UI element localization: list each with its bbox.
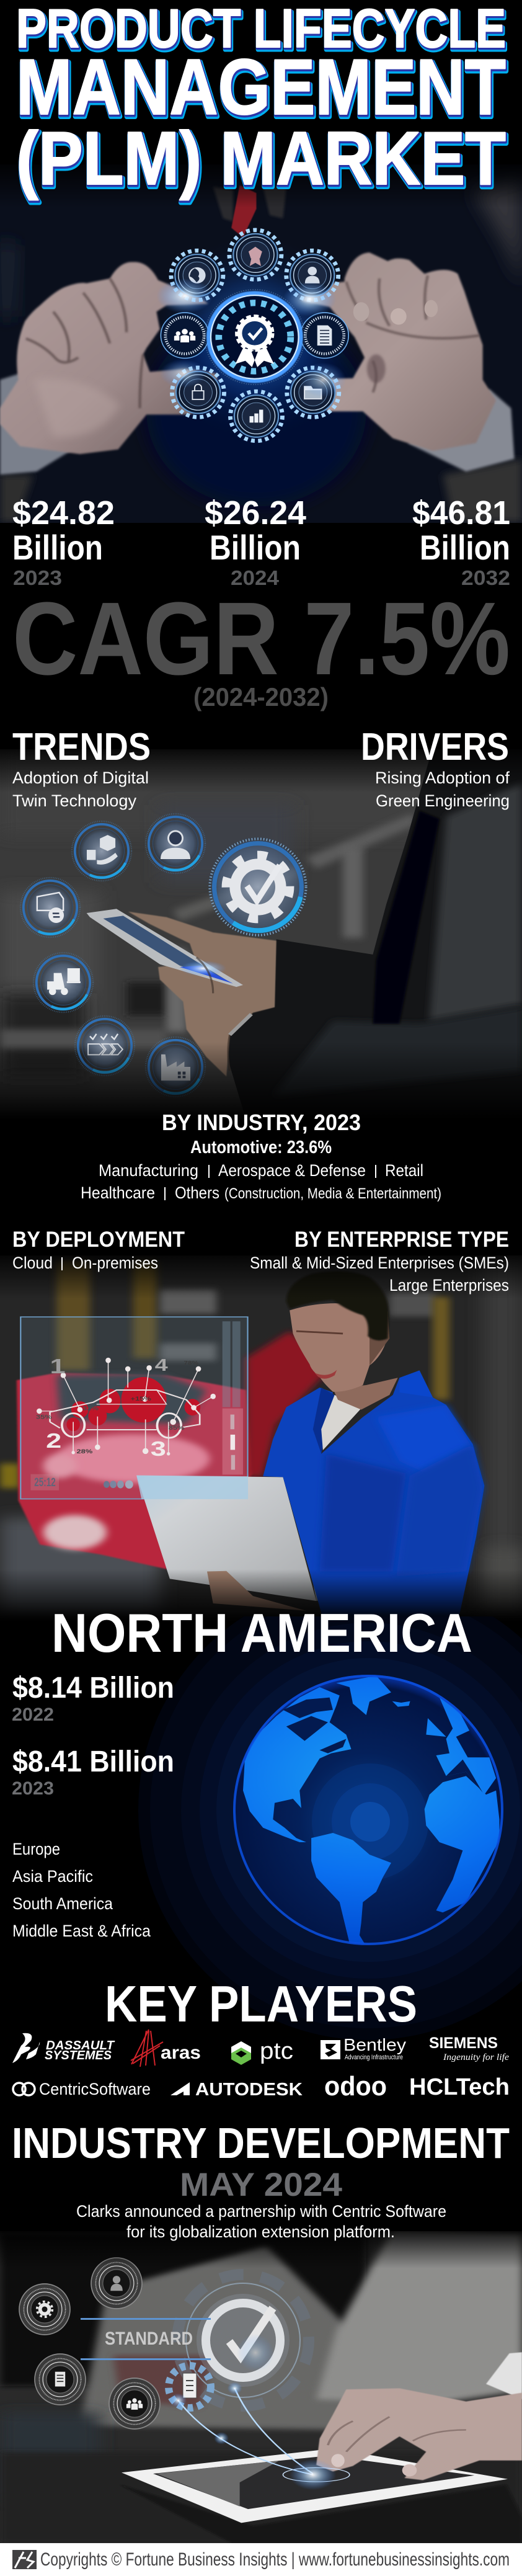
drivers block: Green Engineering (376, 791, 510, 810)
hand (316, 2352, 522, 2480)
icon: headset agent (146, 814, 205, 873)
logo: Siemens (429, 2035, 509, 2062)
by industry block: Manufacturing (99, 1161, 198, 1180)
small document gear (169, 2366, 211, 2408)
logo: Fortune Business Insights (12, 2550, 37, 2569)
footer (0, 2543, 522, 2576)
photo edge fades (0, 749, 522, 793)
man in dark suit (226, 747, 522, 1121)
gear: globe (171, 251, 223, 300)
icon: factory (146, 1037, 205, 1097)
other regions list: Middle East & Africa (12, 1922, 151, 1940)
logo: Odoo: odoo (324, 2071, 387, 2101)
regional value 2022: 2022 (12, 1705, 54, 1725)
market size 2024: Billion (210, 528, 301, 567)
logo: Dassault Systemes (12, 2033, 115, 2063)
market size 2032: 2032 (461, 566, 510, 589)
development description: for its globalization extension platform. (126, 2222, 395, 2241)
market size 2023 (12, 494, 115, 589)
holographic car diagnostics panel (20, 1317, 248, 1499)
icon: approved process (75, 1016, 135, 1076)
logo: Siemens: SIEMENS (429, 2035, 498, 2052)
logo: Bentley: Advancing Infrastructure (345, 2054, 403, 2061)
logo: Siemens: Ingenuity for life (443, 2052, 509, 2062)
blue connector lines and standard label (81, 2318, 211, 2360)
by enterprise type block (250, 1228, 509, 1295)
by industry block: Automotive: 23.6% (190, 1138, 332, 1157)
trends block: TRENDS (12, 726, 151, 769)
other regions list: South America (12, 1894, 113, 1913)
market size 2024: $26.24 (205, 494, 306, 532)
diagnostic labels: 3 (151, 1438, 166, 1460)
logo: Centric Software: CentricSoftware (39, 2080, 151, 2098)
gear: person (286, 251, 338, 300)
market size 2032 (412, 494, 510, 589)
regional heading: NORTH AMERICA (51, 1602, 472, 1664)
icon: forklift (33, 953, 93, 1012)
market size 2023: Billion (12, 528, 103, 567)
trends block: Adoption of Digital (12, 769, 149, 787)
development date: MAY 2024 (180, 2167, 343, 2203)
diagnostic labels: 35% (36, 1414, 52, 1420)
diagnostic labels: 2 (46, 1430, 61, 1452)
regional value 2023: $8.41 Billion (12, 1745, 174, 1778)
gear: certificate (229, 230, 281, 280)
logo: Bentley: Bentley (343, 2035, 406, 2054)
globe (233, 1675, 503, 1952)
panel: globe halo (138, 1580, 522, 2040)
by industry block: Aerospace & Defense (218, 1161, 366, 1180)
globe rim (234, 1676, 502, 1944)
logo: Bentley (321, 2035, 406, 2061)
gear: folder (287, 368, 339, 417)
CAGR: (2024-2032) (193, 682, 329, 711)
key players heading: KEY PLAYERS (105, 1975, 417, 2033)
by deployment block (12, 1228, 185, 1272)
market size 2024 (205, 494, 306, 589)
icon: person circle (91, 2258, 142, 2309)
left cuff (0, 373, 70, 476)
logo: Dassault Systemes: SYSTEMES (45, 2049, 112, 2062)
diagnostic labels: 1 (50, 1355, 66, 1378)
right cuff (408, 390, 515, 471)
hand with tablet (87, 909, 276, 1076)
development description (76, 2202, 446, 2241)
logo: Autodesk: AUTODESK (195, 2080, 303, 2100)
market size 2023: 2023 (13, 566, 62, 589)
icon: box exchange (20, 878, 80, 937)
development description: Clarks announced a partnership with Centric Software (76, 2202, 446, 2221)
logo: PTC (231, 2038, 293, 2065)
by deployment block: On-premises (72, 1254, 158, 1272)
by deployment block: Cloud (12, 1254, 53, 1272)
by industry block: Retail (385, 1161, 423, 1180)
blurred warehouse background (0, 747, 522, 1076)
photo edge fades (0, 1255, 522, 1299)
other regions list (12, 1840, 151, 1940)
diagnostic labels: 78% (184, 1360, 198, 1366)
logo: HCLTech: HCLTech (409, 2074, 510, 2100)
diagnostic labels (34, 1355, 198, 1489)
blurred background (0, 2229, 522, 2544)
diagnostic labels: 85% (169, 1425, 184, 1432)
diagnostic labels: 28% (77, 1448, 92, 1455)
trends block: Twin Technology (12, 791, 137, 810)
gear: lock (172, 368, 224, 417)
big gear outline (177, 2275, 309, 2406)
icon: gear check (208, 837, 307, 937)
other regions list: Asia Pacific (12, 1867, 93, 1886)
panel: mechanic with laptop photo (0, 1228, 522, 1630)
by enterprise type block: Large Enterprises (389, 1276, 509, 1295)
gear cluster (156, 230, 348, 441)
market size 2023: $24.82 (12, 494, 115, 532)
touch light trails (169, 2382, 350, 2490)
by deployment block: BY DEPLOYMENT (12, 1228, 185, 1252)
central badge (205, 290, 304, 385)
panel: trends and drivers photo (0, 747, 522, 1126)
regional value 2022 (12, 1672, 174, 1725)
market size 2032: $46.81 (412, 494, 510, 532)
by industry block (81, 1110, 441, 1202)
right hand (293, 252, 496, 451)
panel: hero photo of hands holding gear icons (0, 164, 522, 523)
by industry block: Others (175, 1183, 219, 1202)
diagnostic labels: 32% (82, 1406, 99, 1412)
logo: Dassault Systemes: DASSAULT (46, 2039, 115, 2052)
top fade of hero (0, 164, 522, 208)
regional value 2022: $8.14 Billion (12, 1672, 174, 1705)
logo: PTC: ptc (260, 2038, 293, 2064)
drivers block (361, 726, 510, 810)
left hand (0, 262, 219, 454)
trends block (12, 726, 151, 810)
drivers block: Rising Adoption of (375, 769, 510, 787)
regional value 2023 (12, 1745, 174, 1799)
laptop (136, 1476, 394, 1611)
gear: bar chart (230, 391, 282, 441)
icon: box in hand (72, 821, 131, 881)
blue connector lines and standard label: STANDARD (105, 2329, 193, 2349)
logo: Aras: aras (161, 2043, 201, 2063)
side icon: team (161, 313, 209, 359)
mechanic in blue overalls (263, 1271, 484, 1630)
market size 2024: 2024 (231, 566, 280, 589)
diagnostic labels: 4 (155, 1355, 168, 1375)
regional value 2023: 2023 (12, 1778, 54, 1799)
panel: tablet and standards photo (0, 2229, 522, 2544)
icon: gear circle (19, 2284, 70, 2335)
title (16, 0, 507, 203)
other regions list: Europe (12, 1840, 60, 1858)
suit and background tones (0, 177, 522, 522)
by industry block: BY INDUSTRY, 2023 (162, 1110, 361, 1135)
icon: team circle (109, 2378, 160, 2429)
photo top fade (0, 2231, 522, 2268)
diagnostic labels: 25:12 (34, 1475, 56, 1489)
diagnostic labels: +15% (131, 1396, 151, 1402)
by industry block: Healthcare (81, 1183, 155, 1202)
icon: document circle (35, 2354, 86, 2405)
blurred garage and red car (0, 1228, 522, 1616)
continents (243, 1676, 500, 1952)
logo: Aras (131, 2030, 201, 2067)
tablet (122, 2448, 508, 2523)
by industry block: (Construction, Media & Entertainment) (224, 1185, 441, 1202)
glow behind gears (149, 236, 360, 440)
side icon: document (301, 313, 348, 359)
